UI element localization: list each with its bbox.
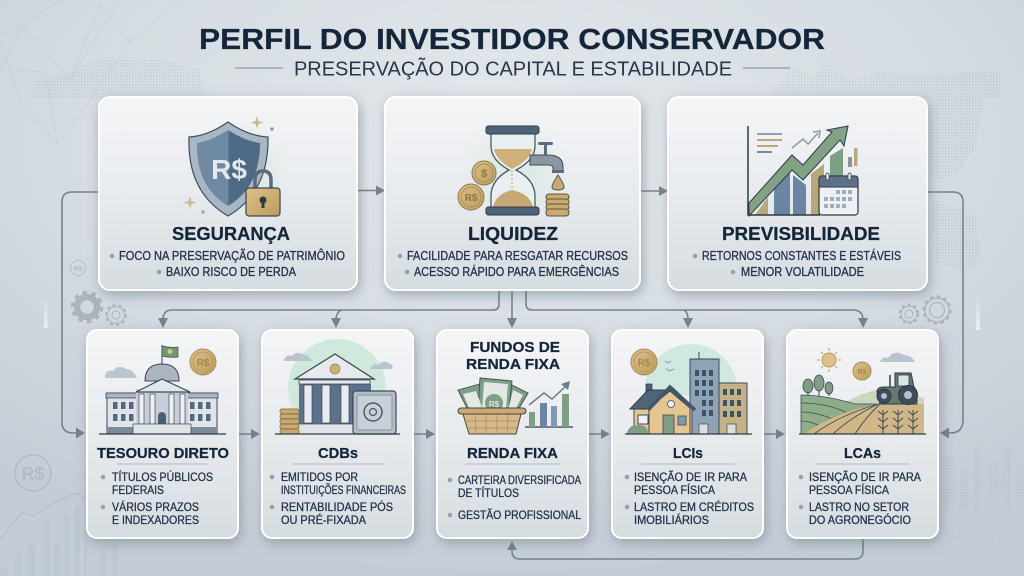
bullet list: ISENÇÃO DE IR PARA (634, 471, 747, 484)
panel: Tesouro Direto (87, 330, 238, 538)
bullet list: IMOBILIÁRIOS (634, 514, 709, 527)
bullet list: OU PRÉ-FIXADA (281, 514, 366, 527)
bullet list: DE TÍTULOS (458, 487, 519, 500)
bullet list: FACILIDADE PARA RESGATAR RECURSOS (407, 249, 628, 263)
panel: LCAs (787, 330, 938, 538)
heading: Fundos de Renda Fixa: FUNDOS DE (470, 339, 560, 356)
heading: PREVISBILIDADE (722, 224, 880, 244)
bullet list: PESSOA FÍSICA (634, 484, 715, 497)
arrow: right feedback loop from Previsibilidade to LCAs (927, 192, 963, 438)
bullet list: DO AGRONEGÓCIO (809, 514, 911, 527)
bullet list (625, 471, 754, 527)
bullet list: PESSOA FÍSICA (809, 484, 889, 497)
bullet list: VÁRIOS PRAZOS (112, 501, 199, 514)
bullet list: FEDERAIS (112, 485, 164, 497)
icon: rising chart with calendar (748, 126, 858, 216)
decorative gears and coin marks: R$ (21, 464, 45, 484)
bullet list (799, 471, 921, 527)
bullet list: INSTITUIÇÕES FINANCEIRAS (281, 484, 406, 497)
arrow: Fundos to LCIs (588, 429, 610, 439)
icon: house, towers and coin (625, 344, 752, 434)
icon: bank with safe and coins (275, 339, 400, 437)
bullet list: ACESSO RÁPIDO PARA EMERGÊNCIAS (414, 264, 619, 279)
bullet list (448, 475, 582, 522)
arrow: CDBs to Fundos (413, 429, 435, 439)
heading: CDBs (318, 445, 358, 462)
heading: LIQUIDEZ (468, 224, 558, 244)
icon: farm field with tractor, sun and coin (799, 348, 926, 434)
arrow: Liquidez to Previsibilidade (640, 186, 668, 196)
bullet list (110, 248, 345, 279)
bullet list (101, 471, 213, 527)
bullet list: RETORNOS CONSTANTES E ESTÁVEIS (702, 248, 901, 263)
heading: LCAs (844, 445, 881, 462)
bullet list: TÍTULOS PÚBLICOS (112, 471, 213, 484)
bullet list: RENTABILIDADE PÓS (281, 501, 393, 514)
arrow: LCIs to LCAs (763, 429, 785, 439)
bullet list: GESTÃO PROFISSIONAL (458, 509, 582, 522)
heading: LCIs (673, 445, 703, 462)
bullet list: LASTRO EM CRÉDITOS (634, 501, 754, 514)
bullet list: FOCO NA PRESERVAÇÃO DE PATRIMÔNIO (119, 248, 345, 263)
decorative gears and coin marks: R$ (74, 266, 83, 273)
icon: shield with R$ and padlock (184, 116, 280, 216)
arrow: LCAs back to Fundos (507, 538, 863, 559)
icon: house, towers and coin: R$ (638, 358, 651, 369)
icon: basket of banknotes and small chart (458, 378, 573, 434)
heading: SEGURANÇA (172, 224, 290, 244)
title: PERFIL DO INVESTIDOR CONSERVADOR (199, 24, 825, 56)
icon: basket of banknotes and small chart: R$ (489, 400, 500, 409)
heading: Fundos de Renda Fixa (466, 339, 560, 373)
arrow: Liquidez to Fundos de Renda Fixa (507, 290, 517, 328)
icon: hourglass with tap and coins: R$ (465, 193, 478, 204)
bullet list (693, 248, 901, 279)
heading: Fundos de Renda Fixa: RENDA FIXA (466, 356, 560, 373)
panel: Previsibilidade (668, 97, 927, 290)
arrow: Segurança to Liquidez (357, 186, 385, 196)
bullet list: MENOR VOLATILIDADE (741, 265, 864, 279)
bullet list: LASTRO NO SETOR (809, 502, 909, 514)
bullet list: ISENÇÃO DE IR PARA (809, 471, 921, 484)
icon: shield with R$ and padlock: R$ (211, 154, 247, 185)
bullet list: E INDEXADORES (112, 515, 199, 527)
heading: TESOURO DIRETO (97, 445, 229, 462)
icon: hourglass with tap and coins: $ (481, 168, 487, 180)
decorative gears and coin marks (15, 260, 950, 491)
bullet list: EMITIDOS POR (281, 472, 358, 484)
icon: hourglass with tap and coins (458, 126, 569, 216)
arrow: Tesouro Direto to CDBs (238, 429, 260, 439)
icon: government building with flag and coin: R$ (197, 358, 210, 369)
panel: CDBs (262, 330, 413, 538)
panel: Liquidez (385, 97, 640, 290)
arrow: left feedback loop from Segurança to Tesouro Direto (62, 192, 99, 438)
bullet list (398, 249, 628, 279)
heading: Renda Fixa: RENDA FIXA (467, 445, 558, 462)
icon: government building with flag and coin (99, 345, 226, 434)
panel: Fundos de Renda Fixa (437, 330, 588, 538)
bullet list (270, 472, 406, 527)
arrow: Liquidez branches to right products (526, 290, 868, 328)
subtitle: PRESERVAÇÃO DO CAPITAL E ESTABILIDADE (294, 56, 732, 80)
panel: LCIs (612, 330, 763, 538)
panel: Segurança (99, 97, 357, 290)
arrow: Liquidez branches to left products (158, 290, 499, 328)
bullet list: CARTEIRA DIVERSIFICADA (458, 475, 581, 487)
icon: farm field with tractor, sun and coin: R$ (858, 369, 867, 376)
bullet list: BAIXO RISCO DE PERDA (166, 265, 297, 279)
